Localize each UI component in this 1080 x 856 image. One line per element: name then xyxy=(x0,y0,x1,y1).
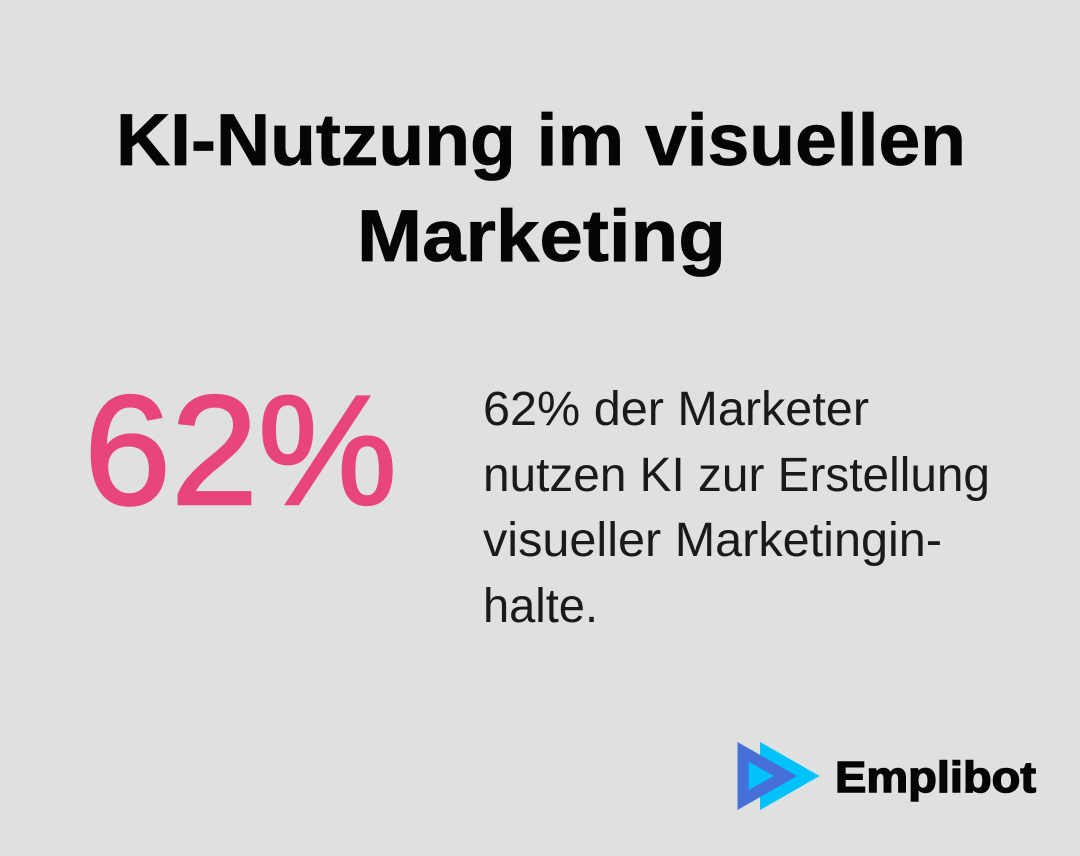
description text: visueller Marketingin- xyxy=(483,514,942,567)
title xyxy=(116,100,966,277)
title: Marketing xyxy=(357,196,726,277)
big statistic: 62%: 62% xyxy=(84,364,397,538)
description text: halte. xyxy=(483,580,598,633)
description text: 62% der Marketer xyxy=(483,383,869,436)
title: KI-Nutzung im visuellen xyxy=(116,100,966,181)
icon: play triangles xyxy=(738,742,820,810)
description text xyxy=(483,383,990,633)
description text: nutzen KI zur Erstellung xyxy=(483,449,990,502)
logo wordmark: Emplibot xyxy=(835,753,1036,802)
logo: Emplibot xyxy=(738,742,1036,810)
